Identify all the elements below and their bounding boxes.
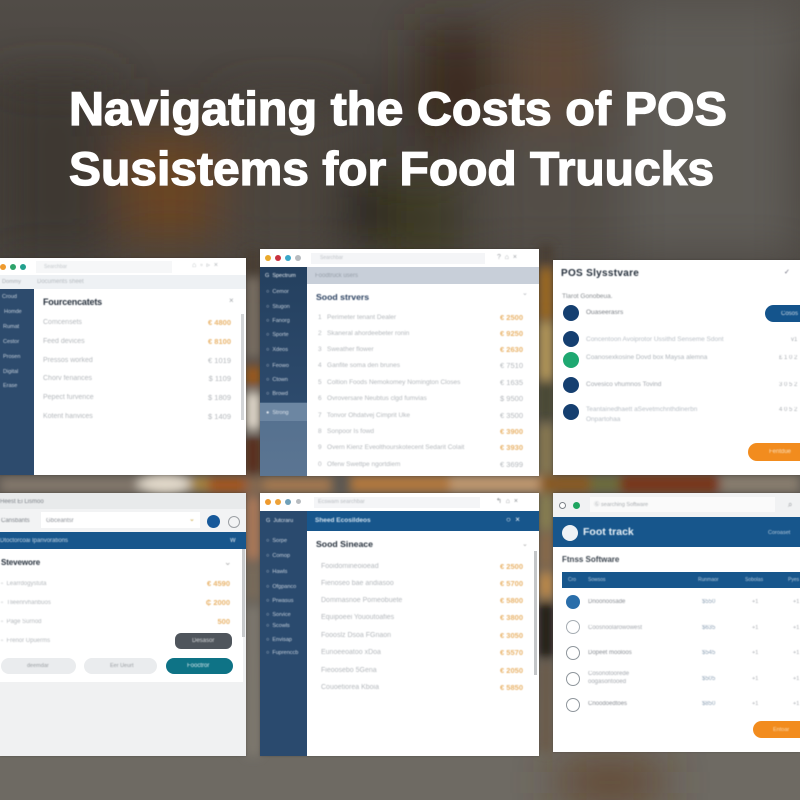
panel: window 6 food truck table: $505 [702,676,715,682]
row 1 [566,595,580,609]
section label: Tlarot Gonobeua. [562,293,613,300]
panel: window 4 software form: Eer Ueurt [110,663,134,669]
sidebar: ○ Sorvice [266,612,291,618]
sidebar: ○ Envisap [266,637,292,643]
panel: window 2 long list: 8 Sonpoor Is fowd [318,428,374,435]
sidebar: ○ Fanorg [266,318,290,324]
section heading: Ftnss Software [562,555,619,564]
panel: window 6 food truck table: Entoar [773,727,789,733]
panel: window 2 long list: 5 Coltion Foods Nemokomey Nomington Closes [318,379,460,386]
blue band: Dtoctorcoai Ipanvorations [0,538,68,544]
panel: window 6 food truck table [553,493,800,752]
panel: window 3 software list: ✓ [784,269,790,276]
sidebar: Homde [4,309,22,315]
sub header bar: Documents sheet [37,279,84,285]
panel: window 3 software list: v1 [791,337,797,343]
panel: window 2 long list: 6 Ovroversare Neubtus clgd fumvias [318,395,427,402]
panel: window 2 long list: € 3930 [500,443,523,452]
sidebar: ○ Hawls [266,569,287,575]
panel: window 5 cost list: € 5800 [500,596,523,605]
panel: window 3 software list [553,260,800,475]
panel: window 3 software list: Ouaseerasrs [586,309,623,316]
panel: window 6 food truck table: $635 [702,625,715,631]
teal button [166,658,233,674]
section heading: Stevewore [1,558,40,567]
panel: window 3 software list: £ 1 0 2 [779,355,797,361]
panel: window 3 software list: Covesico vhumnos Tovind [586,381,661,388]
sidebar: Rumat [3,324,19,330]
title strip: Heest Ei Lismoo [0,499,44,505]
sidebar: ○ Browd [266,391,288,397]
panel: window 5 cost list: € 2500 [500,562,523,571]
panel: window 3 software list: Concentoon Avoiprotor Ussithd Senseme Sdont [586,336,724,343]
panel: window 3 software list: 3 0 5 2 [779,382,797,388]
sidebar: G Jutcraru [266,518,293,524]
panel: window 6 food truck table: +1 [752,701,758,707]
panel: window 1 cost list: $ 1409 [208,412,231,421]
panel: window 5 cost list: € 5700 [500,579,523,588]
sidebar: Digital [3,369,18,375]
orange button [748,443,800,461]
search row: ⌄ [189,516,195,523]
blue header: Foot track [583,526,634,538]
panel: window 4 software form: 500 [217,617,230,626]
panel: window 6 food truck table: +1 [752,599,758,605]
sidebar [260,267,307,476]
title strip [0,493,246,509]
search row: Cansbants [1,518,30,524]
panel: window 6 food truck table: +1 [793,650,799,656]
panel: window 4 software form [0,493,246,756]
list heading: Sood Sineace [316,539,373,549]
panel: window 1 cost list: $ 1109 [209,374,231,383]
panel: window 2 long list: € 1635 [500,378,523,387]
panel: window 2 long list: € 7510 [500,361,523,370]
grey button [1,658,76,674]
panel: window 5 cost list: Fienoseo bae andiasoo [321,580,394,587]
sidebar: ● Strong [266,410,289,416]
row 5 [563,404,579,420]
panel: window 6 food truck table: $850 [702,701,715,707]
sidebar [260,511,307,756]
panel: window 1 cost list: € 8100 [208,337,231,346]
orange button [753,721,800,738]
grey button [84,658,157,674]
window toolbar: ? ⌂ × [497,254,517,261]
cost rows: 1 Perimeter tenant Dealer [318,314,396,321]
rows: ▫ Learrdogystuta [1,581,46,587]
sidebar: ○ Ctown [266,377,288,383]
blue header [553,517,800,547]
panel: window 6 food truck table: +1 [752,625,758,631]
panel: window 5 cost list: € 2050 [500,666,523,675]
panel: window 6 food truck table: Coosnoolarowowest [588,625,642,631]
panel: window 1 cost list: Chorv fenances [43,375,92,382]
sidebar: ○ Fuprenccb [266,650,298,656]
panel: window 2 long list: 7 Tonvor Ohdatvej Cimprit Uke [318,412,410,419]
panel: window 1 cost list [0,258,246,475]
panel: window 1 cost list: Pressos worked [43,357,93,364]
search row: Gbceantsr [46,518,74,524]
table header: Runmaor [698,577,719,583]
sub header bar: Dommy [2,279,21,285]
sidebar: ○ Feowo [266,363,289,369]
table header: Sobolas [745,577,763,583]
panel: window 6 food truck table: +1 [793,676,799,682]
panel: window 1 cost list: Pepect furvence [43,394,94,401]
white content [0,549,243,682]
sidebar: ○ Stugon [266,304,290,310]
panel: window 6 food truck table: +1 [793,701,799,707]
row 4 [563,377,579,393]
row 3 [563,352,579,368]
panel: window 6 food truck table: +1 [793,625,799,631]
panel: window 2 long list: ⌄ [522,290,528,297]
window toolbar [553,493,800,517]
panel: window 5 cost list: Couoetiorea Kboia [321,684,379,691]
window toolbar: Ⓖ searching Software [594,502,648,508]
panel: window 4 software form: ₵ 2000 [206,598,230,607]
title: Susistems for Food Truucks [69,142,714,195]
panel: window 2 long list: € 3900 [500,427,523,436]
sidebar: ○ Cemor [266,289,289,295]
panel: window 4 software form: € 4590 [207,579,230,588]
panel: window 6 food truck table: Dnoonoosade [588,599,625,605]
sidebar: ○ Xdeos [266,347,288,353]
panel: window 4 software form: Desasor [192,638,214,644]
breadcrumb bar [307,267,539,284]
table header: Pyes [788,577,799,583]
row 5 [566,698,580,712]
panel: window 1 cost list: € 4800 [208,318,231,327]
scrollbar [242,549,245,637]
search row [0,509,246,532]
window toolbar: Searchbar [320,255,343,261]
window toolbar [0,258,246,275]
window toolbar: Ecswam searchbar [318,499,365,505]
sidebar: ○ Prwasus [266,598,293,604]
panel: window 6 food truck table: +1 [793,599,799,605]
panel: window 4 software form: ⌄ [224,557,232,567]
panel: window 2 long list: 4 Ganfite soma den brunes [318,362,400,369]
title: Navigating the Costs of POS [69,82,727,135]
list heading: Fourcencatets [43,297,102,307]
blue header: ○ × [506,515,520,524]
scrollbar [241,314,244,420]
panel: window 2 long list [260,249,539,476]
panel: window 2 long list: 2 Skaneral ahordeebeter ronin [318,330,409,337]
panel: window 5 cost list: Equipoeei Yououtoafies [321,614,394,621]
window toolbar: ↰ ⌂ × [496,498,518,505]
panel: window 6 food truck table: Cnoodoedtoes [588,701,627,707]
panel: window 2 long list: 0 Oferw Swettpe ngortdiem [318,461,400,468]
scrollbar [534,551,537,675]
panel: window 2 long list: 9 Overn Kienz Eveolthourskotecent Sedarit Colait [318,444,464,451]
panel: window 4 software form: Fooctror [187,663,209,669]
panel: window 5 cost list: € 3800 [500,613,523,622]
window heading: POS Slysstvare [561,268,639,279]
panel: window 5 cost list: Fieoosebo 5Gena [321,667,377,674]
sidebar: ○ Scowls [266,623,290,629]
panel: window 3 software list: Coanosexkosine Dovd box Maysa alemna [586,354,707,361]
panel: window 6 food truck table: Dopeet mooloos [588,650,632,656]
sidebar [0,289,34,475]
panel: window 6 food truck table: +1 [752,676,758,682]
sidebar: G Spectrum [265,273,296,279]
blue header: Sheed Ecosildeos [315,517,371,524]
cost rows: Comcensets [43,319,82,326]
panel: window 5 cost list: Foooslz Dsoa FGnaon [321,632,391,639]
panel: window 5 cost list [260,493,539,756]
row 2 [566,620,580,634]
panel: window 6 food truck table: Cosonotoorede [588,671,629,677]
table header: Cro [568,577,576,583]
dark button [175,633,232,649]
panel: window 2 long list: € 9250 [500,329,523,338]
panel: window 1 cost list: Kotent hanvices [43,413,93,420]
panel: window 5 cost list: ⌄ [522,541,528,548]
panel: window 2 long list: € 3500 [500,411,523,420]
panel: window 6 food truck table: $545 [702,650,715,656]
panel: window 4 software form: ▫ Frenor Upuerms [1,638,50,644]
row 1 [563,305,579,321]
panel: window 3 software list: 4 0 5 2 [779,407,797,413]
panel: window 2 long list: € 2500 [500,313,523,322]
panel: window 2 long list: € 3699 [500,460,523,469]
blue header [260,511,539,531]
window toolbar: ⌂ ▫ ▹ × [192,262,218,269]
row 2 [563,331,579,347]
window toolbar: Searchbar [44,264,67,270]
panel: window 3 software list: Cosos [781,311,798,317]
panel: window 3 software list: Onpartohaa [586,416,620,423]
blue band [0,532,246,549]
panel: window 1 cost list: × [229,296,234,305]
panel: window 1 cost list: $ 1809 [208,393,231,402]
table header: Sowsos [588,577,606,583]
window toolbar: ⌕ [788,500,792,509]
panel: window 1 cost list: € 1019 [208,356,231,365]
panel: window 2 long list: € 2630 [500,345,523,354]
panel: window 1 cost list: Feed devices [43,338,85,345]
sidebar: ○ Ofgpanco [266,584,296,590]
panel: window 6 food truck table: $550 [702,599,715,605]
panel: window 2 long list: 3 Sweather flower [318,346,374,353]
cost rows: Fooidomineoioead [321,563,379,570]
list heading: Sood strvers [316,292,369,302]
panel: window 4 software form: ▫ Tlieenrvhanbuos [1,600,51,606]
sub header bar [0,275,246,289]
sidebar: Prosen [3,354,20,360]
breadcrumb bar: Foodtruck users [315,273,358,279]
panel: window 6 food truck table: oogasontooed [588,679,626,685]
panel: window 3 software list: Fentdue [769,449,791,455]
row 4 [566,672,580,686]
panel: window 5 cost list: € 5570 [500,648,523,657]
sidebar: ○ Sorpe [266,538,287,544]
row 3 [566,646,580,660]
sidebar: Erase [3,383,17,389]
window toolbar [260,493,539,511]
panel: window 6 food truck table: +1 [752,650,758,656]
blue band: W [230,538,236,544]
panel: window 4 software form: ▫ Page Surnod [1,619,42,625]
sidebar: ○ Comop [266,553,290,559]
panel: window 5 cost list: Eunoeeoatoo xDoa [321,649,381,656]
panel: window 5 cost list: € 3050 [500,631,523,640]
table header [562,572,800,588]
blue header: Coroaset [768,530,790,536]
panel: window 5 cost list: Dommasnoe Pomeobuete [321,597,402,604]
panel: window 2 long list: $ 9500 [500,394,523,403]
sidebar: Croud [2,294,17,300]
sidebar: Cestor [3,339,19,345]
panel: window 4 software form: deemdar [27,663,49,669]
panel: window 3 software list: Teantainedhaett aSevetmchnthdinerbn [586,406,697,413]
panel: window 5 cost list: € 5850 [500,683,523,692]
title [69,82,727,195]
sidebar: ○ Sporte [266,332,289,338]
window toolbar [260,249,539,267]
